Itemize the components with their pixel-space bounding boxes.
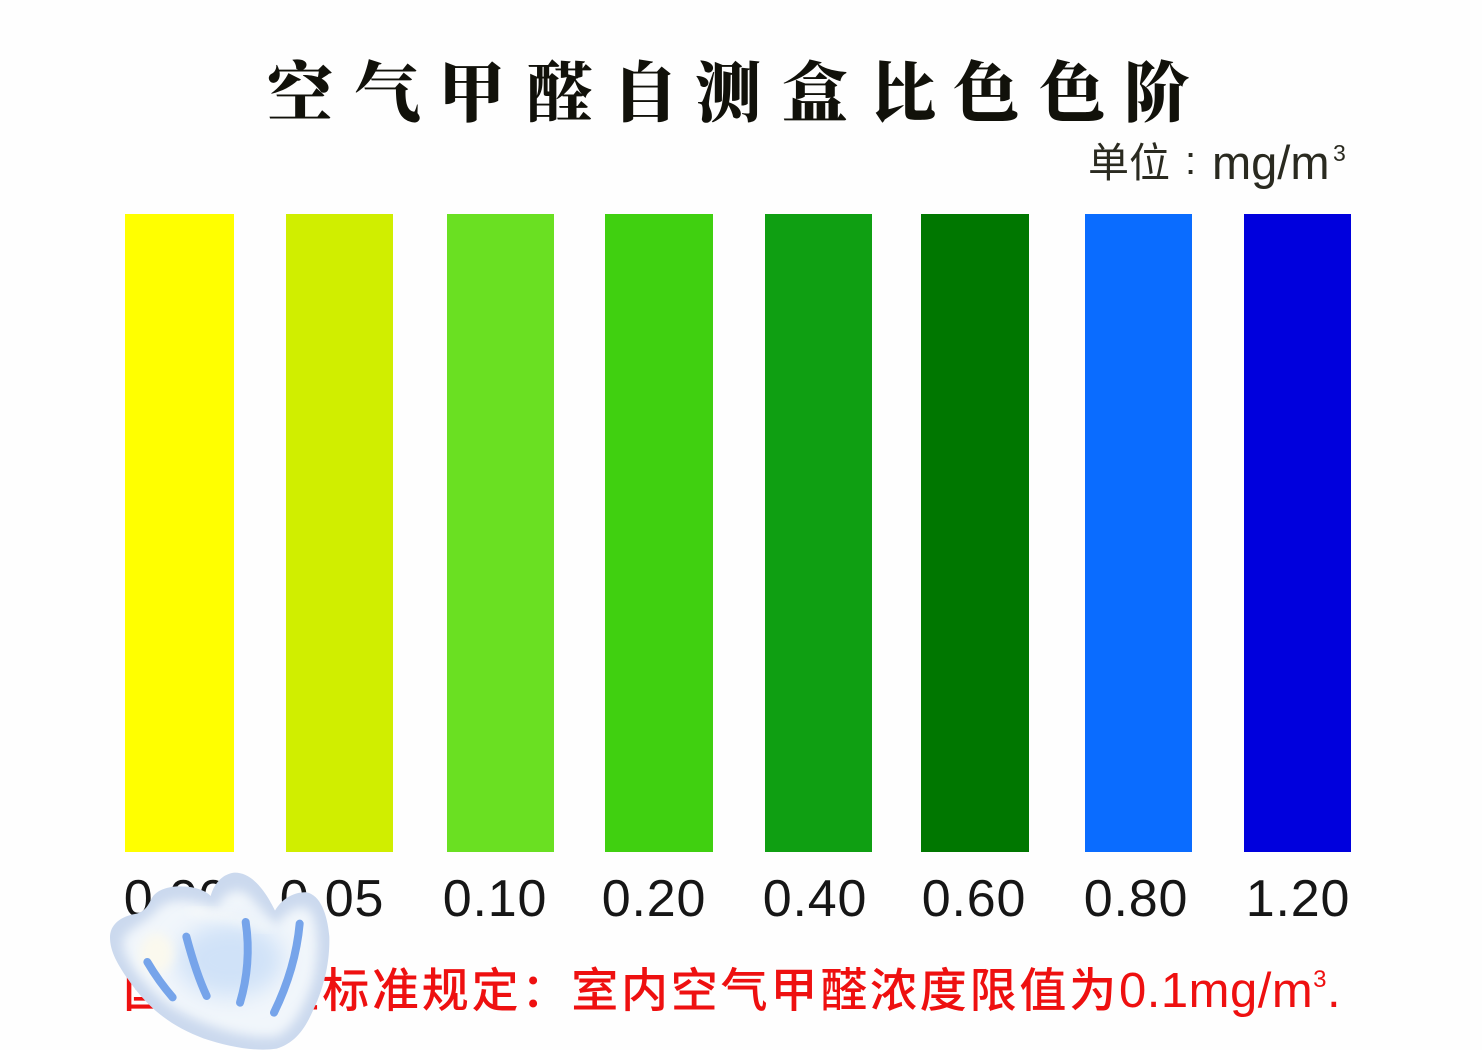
unit label: mg/m (1212, 136, 1330, 189)
shell ridge lines (147, 922, 300, 1013)
title: 甲 (439, 58, 505, 131)
icon: pale blue shell mascot (110, 872, 330, 1050)
title: 自 (612, 58, 678, 131)
colour bar 0.40 (765, 214, 872, 852)
unit label: 单位 (1088, 140, 1170, 186)
title: 阶 (1124, 58, 1190, 131)
value 0.05: 0.05 (280, 870, 384, 928)
value 1.20: 1.20 (1246, 870, 1350, 928)
value 0.40: 0.40 (763, 870, 867, 928)
colour bar 0.80 (1085, 214, 1192, 852)
value 0.80: 0.80 (1084, 870, 1188, 928)
colour bar 0.60 (921, 214, 1029, 852)
title: 空 (267, 58, 333, 131)
value 0.00: 0.00 (124, 870, 228, 928)
title: 醛 (527, 58, 593, 131)
colour bar 0.05 (286, 214, 393, 852)
title: 比 (870, 58, 936, 131)
title: 色 (1039, 58, 1105, 131)
colour bar 0.10 (447, 214, 554, 852)
title: 测 (695, 58, 761, 131)
unit label (1088, 136, 1346, 189)
title: 盒 (782, 58, 848, 131)
value 0.20: 0.20 (602, 870, 706, 928)
unit label: 3 (1333, 140, 1346, 166)
colour bar 0.20 (605, 214, 713, 852)
value 0.10: 0.10 (443, 870, 547, 928)
title: 色 (953, 58, 1019, 131)
title (267, 58, 1190, 131)
value 0.60: 0.60 (922, 870, 1026, 928)
red standard note: 国家卫生标准规定：室内空气甲醛浓度限值为0.1mg/m3. (123, 964, 1341, 1018)
unit label: : (1185, 139, 1196, 183)
colour bar 0.00 (125, 214, 234, 852)
colour bar 1.20 (1244, 214, 1351, 852)
title: 气 (354, 58, 420, 131)
